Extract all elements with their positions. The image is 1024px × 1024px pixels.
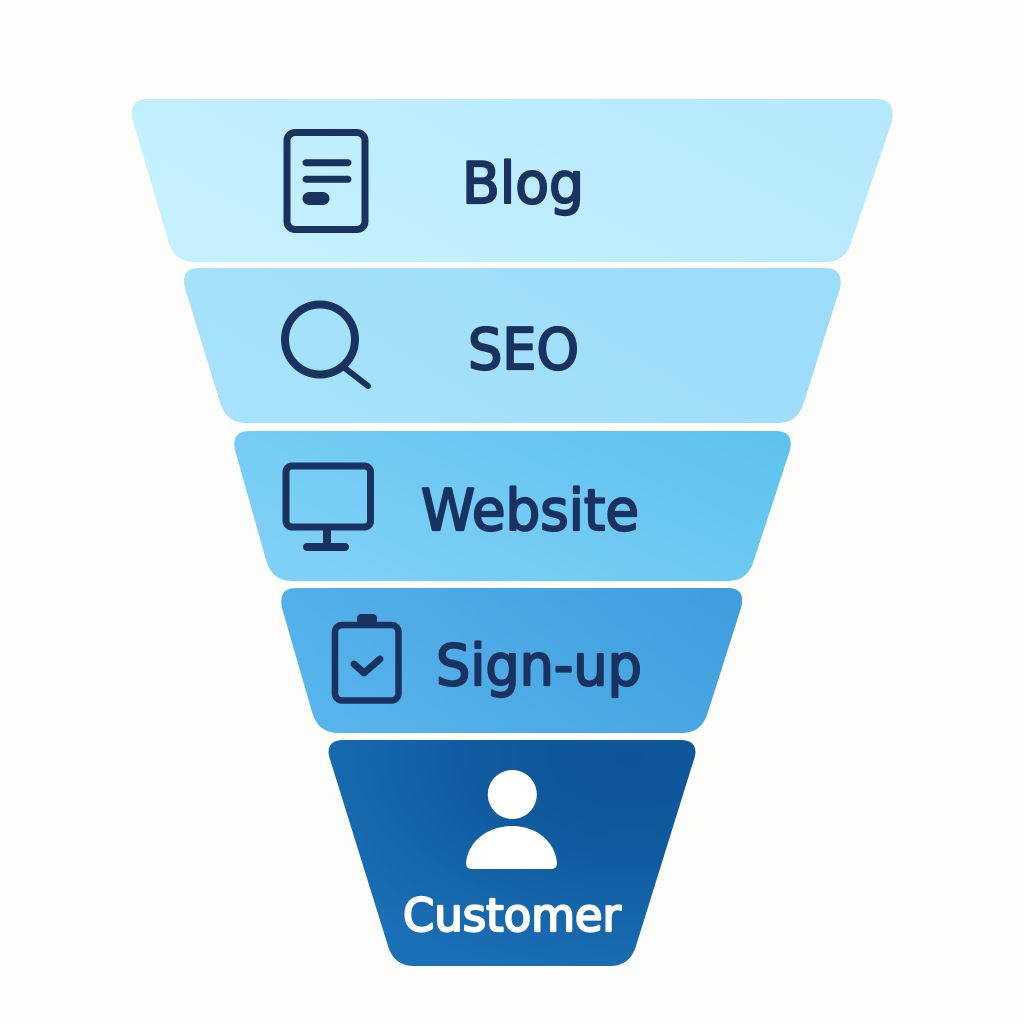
label: Customer: Customer [403,889,621,942]
panel: Website tier [234,431,791,581]
label: Blog: Blog [462,151,584,217]
panel: Blog tier [132,99,893,262]
icon: clipboard with check [335,615,398,700]
label: Website: Website [421,478,639,544]
panel: Customer tier [329,740,695,966]
icon: person [466,770,557,869]
icon: magnifying glass [285,304,368,386]
panel: SEO tier [184,268,841,423]
label: SEO: SEO [468,317,579,383]
icon: monitor [286,466,370,547]
icon: document [287,132,365,230]
label: Sign-up: Sign-up [436,633,642,699]
panel: Sign-up tier [281,588,742,733]
